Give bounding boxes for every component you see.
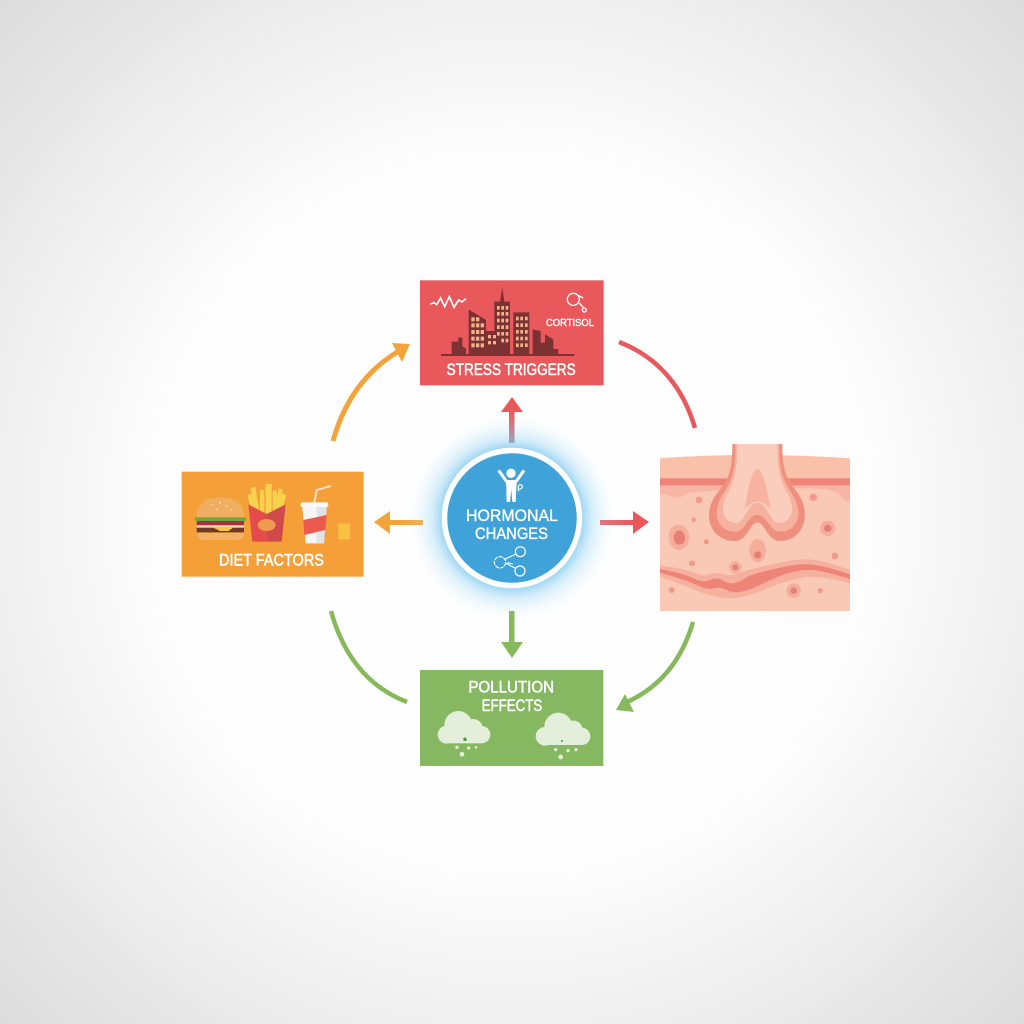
hair follicle	[709, 444, 805, 541]
icon: small drink	[338, 523, 350, 539]
icon: person with raised arms	[499, 469, 524, 502]
heading: diet factors: DIET FACTORS	[219, 550, 324, 569]
glow	[404, 410, 620, 626]
arrow: center to skin	[600, 511, 649, 534]
arrow: skin to pollution	[616, 622, 693, 712]
panel: diet factors	[182, 472, 364, 577]
heading: stress triggers: STRESS TRIGGERS	[447, 360, 576, 379]
icon: fries	[247, 484, 286, 542]
heading: effects: EFFECTS	[482, 696, 542, 715]
arrow: pollution to diet	[331, 611, 407, 702]
arrow: center to pollution	[501, 611, 523, 658]
heading: hormonal: HORMONAL	[466, 507, 558, 525]
heading: changes: CHANGES	[475, 525, 548, 543]
arrow: center to diet	[374, 511, 423, 534]
icon: soda cup	[301, 486, 331, 543]
icon: molecule network	[494, 547, 525, 576]
label: cortisol: CORTISOL	[546, 318, 594, 329]
icon: burger	[195, 497, 246, 540]
arrow: diet to stress	[333, 343, 410, 441]
arrow: center to stress	[501, 397, 523, 443]
panel: stress triggers	[420, 280, 604, 385]
panel: skin cross-section	[660, 444, 850, 611]
icon: right cloud	[536, 713, 590, 759]
pores and lesions	[669, 494, 838, 598]
circle	[444, 450, 580, 586]
heading: pollution: POLLUTION	[468, 678, 554, 697]
icon: stress wave	[430, 297, 466, 307]
icon: city skyline	[441, 287, 574, 356]
icon: cortisol molecule	[567, 293, 586, 312]
skin layers	[660, 455, 850, 611]
panel: pollution effects	[420, 670, 603, 766]
hub: hormonal changes	[404, 410, 620, 626]
icon: left cloud	[438, 711, 490, 757]
arrow: stress to skin	[619, 342, 695, 428]
